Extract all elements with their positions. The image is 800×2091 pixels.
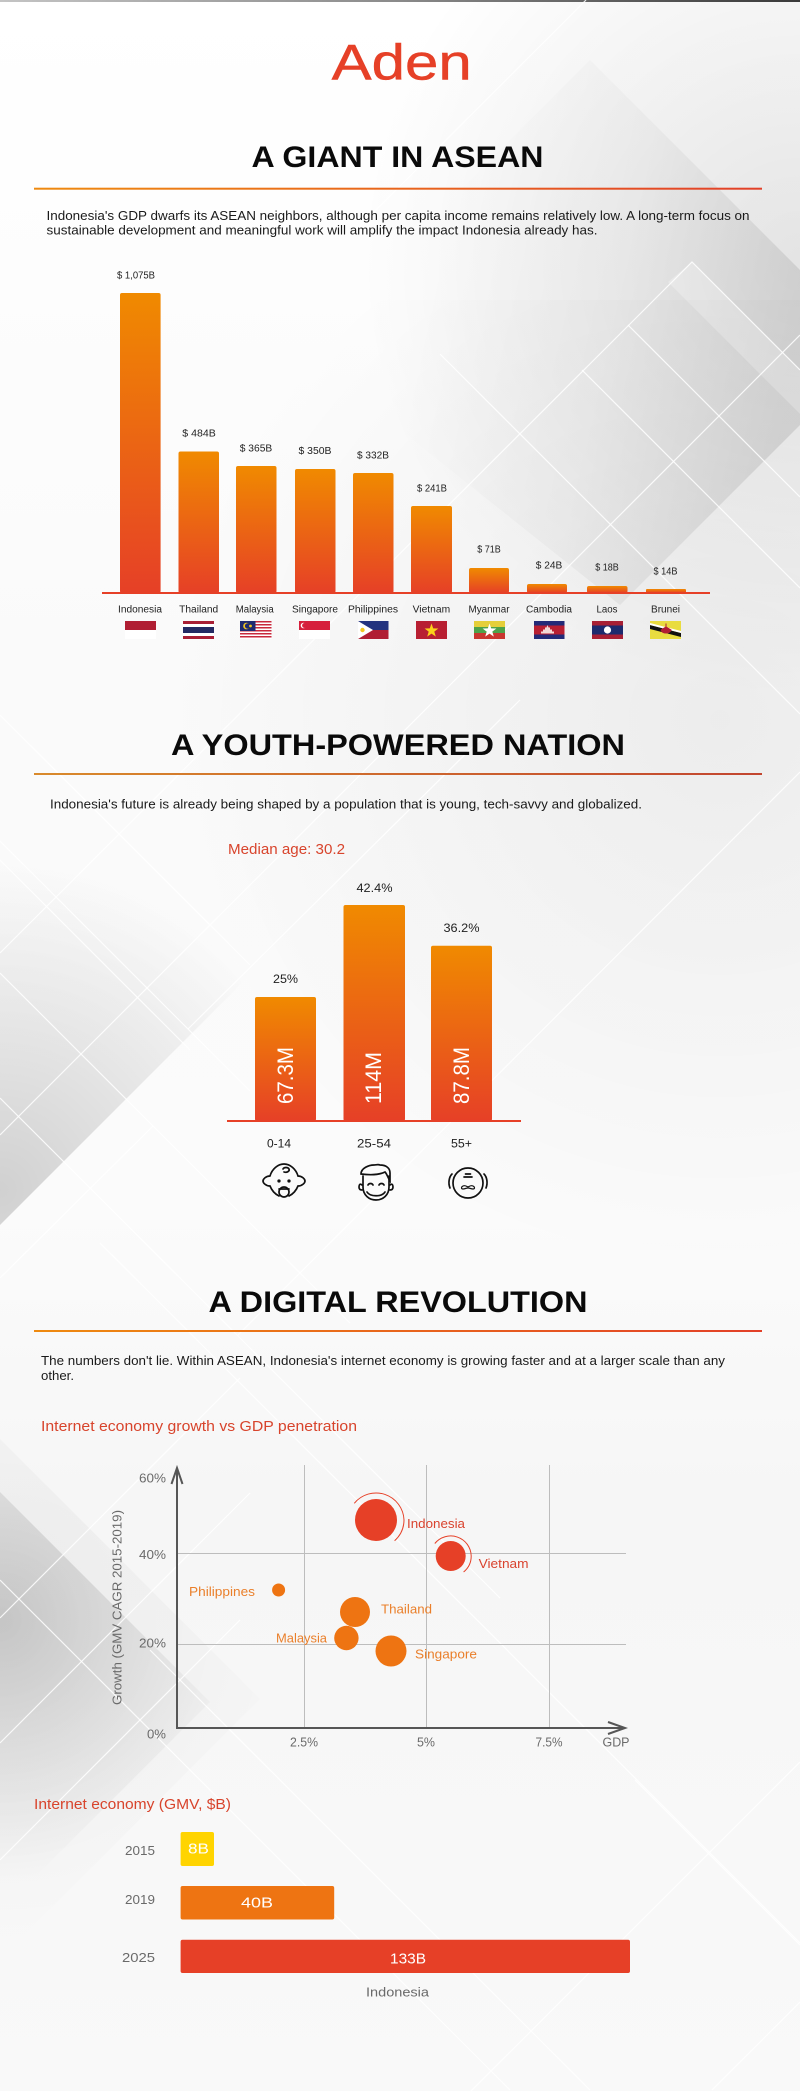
- bar chart: GDP by country: Thailand: [179, 604, 218, 616]
- heading: a youth-powered nation: A YOUTH-POWERED NATION: [171, 729, 625, 762]
- bubble chart: growth vs GDP: [110, 1465, 630, 1750]
- bubble chart: growth vs GDP: GDP: [602, 1736, 630, 1750]
- bar chart: internet economy by year: 8B: [188, 1840, 209, 1858]
- text: population intro: Indonesia's future is already being shaped by a population that is young, tech-savvy and globalized.: [50, 798, 642, 812]
- bar chart: GDP by country: Singapore: [292, 604, 338, 616]
- bar chart: internet economy by year: 2025: [122, 1951, 155, 1965]
- text: GDP intro: sustainable development and meaningful work will amplify the impact Indonesia already has.: [46, 224, 598, 238]
- bar chart: population by age group: [227, 881, 521, 1150]
- icon: flag of Philippines: [358, 621, 388, 639]
- text: digital intro: The numbers don't lie. Within ASEAN, Indonesia's internet economy is growing faster and at a larger scale than any: [41, 1354, 726, 1368]
- bubble chart: growth vs GDP: 2.5%: [290, 1736, 318, 1750]
- text: GDP intro: [46, 209, 750, 238]
- bar chart: population by age group: 55+: [451, 1136, 472, 1150]
- bubble: Philippines: [189, 1584, 285, 1599]
- bar chart: internet economy by year: 2015: [125, 1844, 155, 1858]
- bubble: Singapore: [376, 1636, 477, 1666]
- bar chart: GDP by country: Indonesia: [118, 604, 162, 616]
- bar chart: GDP by country: Cambodia: [526, 604, 572, 616]
- bar chart: population by age group: 0-14: [267, 1136, 291, 1150]
- icon: young man face: [359, 1165, 393, 1200]
- bubble: Indonesia: [354, 1493, 466, 1541]
- bubble: Thailand: Thailand: [381, 1602, 432, 1616]
- bar chart: GDP by country: $ 24B: [536, 560, 563, 572]
- bar chart: population by age group: 36.2%: [444, 921, 480, 935]
- bar chart: GDP by country: Laos: [596, 604, 618, 616]
- text: GDP intro: Indonesia's GDP dwarfs its ASEAN neighbors, although per capita income remains relatively low. A long-term focus on: [46, 209, 750, 223]
- chart title: growth vs GDP penetration: Internet economy growth vs GDP penetration: [41, 1419, 357, 1435]
- bubble: Vietnam: [435, 1536, 529, 1572]
- bubble chart: growth vs GDP: Growth (GMV CAGR 2015-2019): [110, 1510, 124, 1705]
- bubble chart: growth vs GDP: 7.5%: [536, 1736, 562, 1750]
- bubble: Thailand: [340, 1597, 432, 1627]
- icon: flag of Thailand: [183, 621, 214, 639]
- bar chart: GDP by country: Vietnam: [413, 604, 450, 616]
- heading: a digital revolution: A DIGITAL REVOLUTION: [208, 1286, 588, 1319]
- bubble chart: growth vs GDP: 40%: [139, 1548, 166, 1562]
- bar chart: GDP by country: Myanmar: [468, 604, 510, 616]
- icon: flag of Myanmar: [474, 621, 505, 639]
- bar chart: GDP by country: $ 332B: [357, 450, 389, 462]
- bar chart: GDP by country: Philippines: [348, 604, 398, 616]
- bubble: Singapore: Singapore: [415, 1646, 477, 1662]
- bubble: Philippines: Philippines: [189, 1584, 256, 1599]
- bar chart: internet economy by year: 2019: [125, 1893, 155, 1907]
- bubble: Indonesia: Indonesia: [407, 1516, 466, 1531]
- bar chart: GDP by country: $ 241B: [417, 484, 447, 494]
- bubble: Vietnam: Vietnam: [479, 1556, 529, 1571]
- chart title: internet economy GMV: Internet economy (GMV, $B): [34, 1797, 231, 1813]
- bar chart: population by age group: 25-54: [357, 1136, 391, 1150]
- text: digital intro: [41, 1354, 726, 1383]
- bar chart: population by age group: 25%: [273, 972, 298, 986]
- bar chart: GDP by country: $ 350B: [298, 446, 332, 457]
- icon: flag of Indonesia: [125, 621, 156, 639]
- bar chart: internet economy by year: [122, 1832, 630, 2000]
- bubble: Malaysia: Malaysia: [276, 1630, 328, 1646]
- bar chart: internet economy by year: 133B: [390, 1950, 426, 1968]
- bar chart: GDP by country: [102, 270, 710, 616]
- bar chart: internet economy by year: 40B: [241, 1894, 273, 1912]
- icon: flag of Singapore: [299, 621, 330, 639]
- bar chart: population by age group: 42.4%: [356, 881, 393, 895]
- panel: a giant in ASEAN: [34, 141, 762, 639]
- bubble: Malaysia: [276, 1626, 359, 1650]
- icon: baby face: [263, 1164, 305, 1197]
- icon: flag of Laos: [592, 621, 623, 639]
- bar chart: GDP by country: $ 365B: [240, 444, 273, 454]
- icon: flag of Vietnam: [416, 621, 447, 639]
- bar chart: GDP by country: Brunei: [651, 604, 680, 616]
- icon: flag of Brunei: [650, 621, 681, 639]
- label: median age: Median age: 30.2: [228, 842, 345, 858]
- axes: [172, 1468, 625, 1734]
- icon: flag of Malaysia: [240, 621, 272, 639]
- panel: a digital revolution: [34, 1286, 762, 2000]
- bar chart: population by age group: 67.3M: [273, 1047, 298, 1104]
- heading: a giant in ASEAN: A GIANT IN ASEAN: [252, 141, 544, 174]
- bar chart: GDP by country: $ 484B: [182, 428, 216, 440]
- text: digital intro: other.: [41, 1369, 74, 1383]
- bubble chart: growth vs GDP: 0%: [147, 1728, 166, 1742]
- icon: flag of Cambodia: [534, 621, 564, 639]
- bubble chart: growth vs GDP: 5%: [417, 1736, 435, 1750]
- panel: a youth-powered nation: [34, 729, 762, 1200]
- logo: Aden: Aden: [332, 34, 472, 90]
- icon: old man face: [449, 1168, 487, 1198]
- bar chart: GDP by country: $ 71B: [477, 544, 501, 556]
- bubble chart: growth vs GDP: 60%: [139, 1472, 166, 1486]
- bar chart: GDP by country: $ 18B: [595, 562, 619, 574]
- bar chart: population by age group: 114M: [361, 1052, 386, 1104]
- bar chart: internet economy by year: Indonesia: [366, 1986, 429, 2000]
- bar chart: population by age group: 87.8M: [449, 1047, 474, 1104]
- bar chart: GDP by country: $ 1,075B: [117, 270, 155, 282]
- bar chart: GDP by country: Malaysia: [236, 604, 274, 616]
- bar chart: GDP by country: $ 14B: [654, 566, 678, 578]
- bubble chart: growth vs GDP: 20%: [139, 1636, 166, 1650]
